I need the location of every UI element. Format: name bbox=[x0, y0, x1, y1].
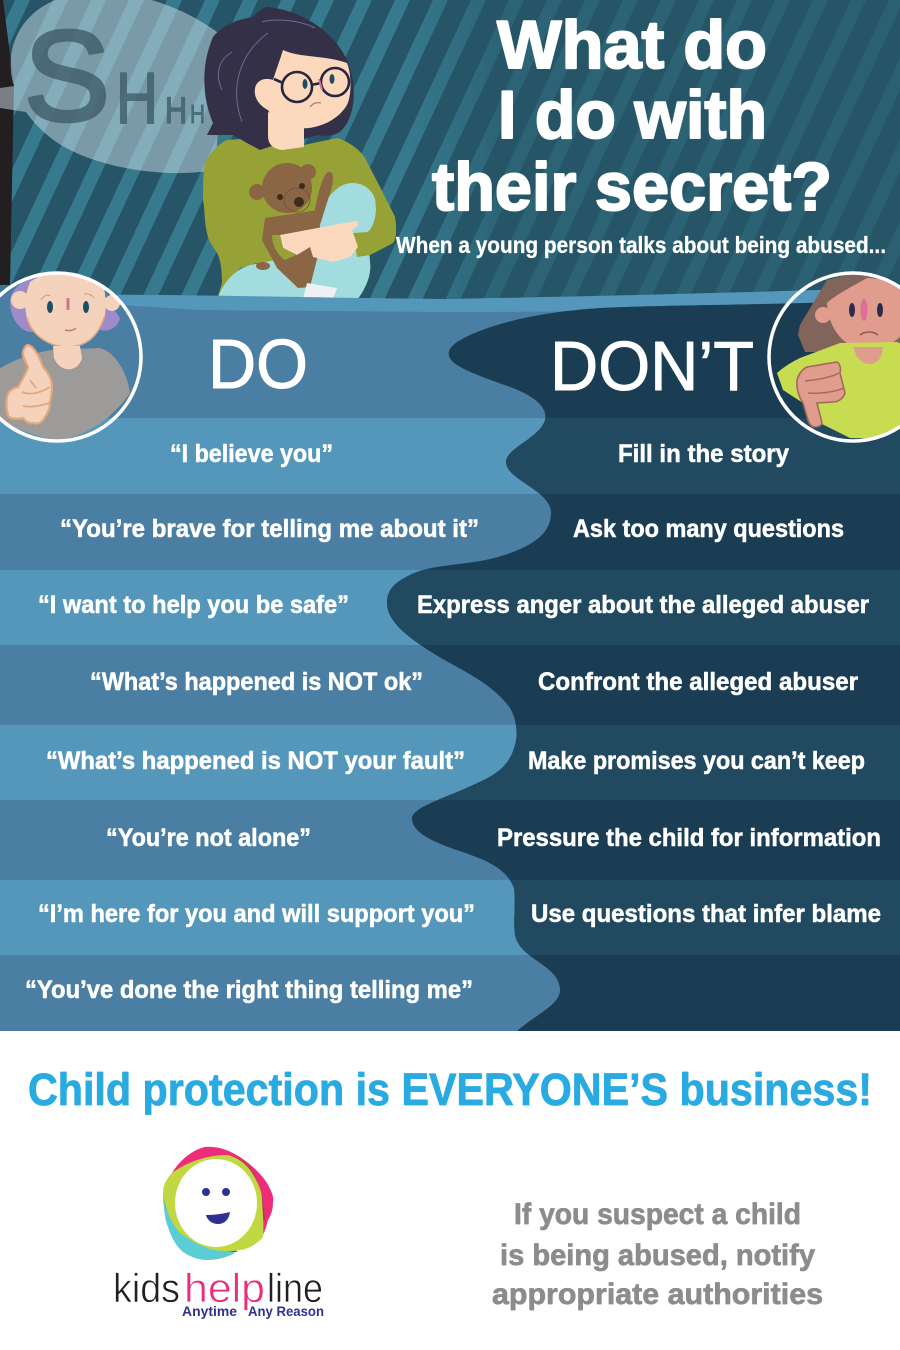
logo wordmark: line bbox=[267, 1265, 323, 1311]
DO list: “You’re not alone” bbox=[106, 824, 311, 852]
DON'T list: Ask too many questions bbox=[573, 515, 844, 543]
header background bbox=[0, 0, 900, 310]
hair back bbox=[204, 7, 354, 150]
sweater bbox=[203, 137, 396, 296]
DO list: “What’s happened is NOT ok” bbox=[90, 668, 423, 696]
DO circle: thumbs up bbox=[0, 272, 142, 444]
DON'T list bbox=[417, 440, 881, 928]
title: their secret? bbox=[432, 149, 832, 225]
white footer background bbox=[0, 1031, 900, 1350]
DO list: “You’ve done the right thing telling me” bbox=[25, 976, 473, 1004]
DON'T list: Make promises you can’t keep bbox=[528, 747, 865, 775]
speech bubble: Shhh: H bbox=[190, 99, 205, 129]
notification message: is being abused, notify bbox=[500, 1239, 815, 1272]
speech bubble: Shhh: H bbox=[116, 59, 158, 139]
DON'T list: Pressure the child for information bbox=[497, 824, 881, 852]
eyes and mouth bbox=[302, 74, 334, 107]
DO list: “You’re brave for telling me about it” bbox=[60, 515, 479, 543]
sleeve cuff bbox=[272, 235, 296, 260]
DON'T list: Fill in the story bbox=[618, 440, 789, 468]
DO list: “I believe you” bbox=[170, 440, 333, 468]
sleeve bbox=[353, 187, 396, 257]
DO list: “What’s happened is NOT your fault” bbox=[46, 747, 465, 775]
DON'T list: Confront the alleged abuser bbox=[538, 668, 858, 696]
DO heading: DO bbox=[208, 325, 308, 403]
speech bubble: Shhh bbox=[0, 0, 225, 173]
notification message bbox=[492, 1198, 823, 1311]
girl holding teddy bbox=[203, 7, 396, 300]
logo: kids helpline bbox=[113, 1147, 324, 1319]
title bbox=[432, 7, 832, 225]
logo wordmark: kids bbox=[113, 1265, 180, 1311]
neck bbox=[268, 112, 304, 150]
logo wordmark: help bbox=[184, 1265, 265, 1311]
logo tagline: Any Reason bbox=[248, 1303, 324, 1319]
DO list: “I want to help you be safe” bbox=[38, 591, 349, 619]
title: I do with bbox=[498, 77, 767, 153]
notification message: appropriate authorities bbox=[492, 1278, 823, 1311]
speech bubble: Shhh: H bbox=[165, 90, 187, 131]
notification message: If you suspect a child bbox=[514, 1198, 801, 1231]
DON'T circle: thumbs down bbox=[769, 272, 900, 441]
title: What do bbox=[497, 7, 767, 83]
dark tree edge bbox=[0, 0, 14, 285]
DON'T list: Express anger about the alleged abuser bbox=[417, 591, 869, 619]
crossed arm and hand bbox=[280, 221, 358, 262]
DO list: “I’m here for you and will support you” bbox=[38, 900, 475, 928]
DO column background bbox=[0, 287, 900, 1031]
hair strands bbox=[218, 20, 315, 122]
teddy bear bbox=[249, 163, 333, 288]
legs bbox=[218, 183, 376, 300]
DO list bbox=[25, 440, 479, 1004]
speech bubble: Shhh: S bbox=[24, 5, 110, 148]
sock bbox=[303, 283, 337, 299]
logo wordmark bbox=[113, 1265, 323, 1311]
glasses bbox=[274, 68, 349, 102]
DON'T list: Use questions that infer blame bbox=[531, 900, 881, 928]
logo mark bbox=[163, 1147, 273, 1260]
logo tagline: Anytime bbox=[182, 1303, 237, 1319]
DON'T column background bbox=[387, 302, 900, 1031]
face bbox=[255, 50, 351, 128]
logo tagline bbox=[182, 1303, 324, 1319]
DON'T heading: DON’T bbox=[550, 327, 754, 405]
